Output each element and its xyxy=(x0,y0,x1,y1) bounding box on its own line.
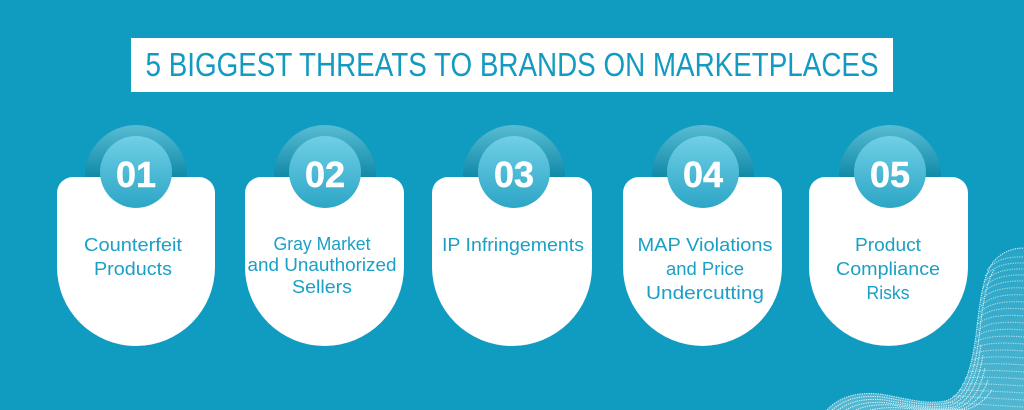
panel: threat 04: Undercutting xyxy=(646,282,764,303)
panel: threat 05 xyxy=(809,125,968,346)
panel: threat 02 xyxy=(245,125,404,346)
panel: threat 03: 03 xyxy=(494,154,534,195)
panel: threat 02: and Unauthorized xyxy=(248,254,396,275)
panel: threat 02: Sellers xyxy=(292,276,352,297)
panel: threat 01: Products xyxy=(94,258,172,279)
panel: threat 01: Counterfeit xyxy=(84,234,182,255)
title banner: 5 BIGGEST THREATS TO BRANDS ON MARKETPLACES xyxy=(146,46,878,83)
panel: threat 01: 01 xyxy=(116,154,156,195)
title banner xyxy=(131,38,893,92)
panel: threat 03 xyxy=(432,125,592,346)
panel: threat 04: 04 xyxy=(683,154,723,195)
panel: threat 04: and Price xyxy=(666,258,744,279)
panel: threat 04 xyxy=(623,125,782,346)
panel: threat 04: MAP Violations xyxy=(638,234,772,255)
panel: threat 05: Compliance xyxy=(836,258,940,279)
panel: threat 01 xyxy=(57,125,215,346)
panel: threat 03: IP Infringements xyxy=(442,234,584,255)
decorative wave: dotted mesh xyxy=(827,248,1024,410)
panel: threat 02: Gray Market xyxy=(274,233,370,254)
panel: threat 02: 02 xyxy=(305,154,345,195)
panel: threat 05: Risks xyxy=(866,282,910,303)
panel: threat 05: 05 xyxy=(870,154,910,195)
panel: threat 05: Product xyxy=(855,234,921,255)
